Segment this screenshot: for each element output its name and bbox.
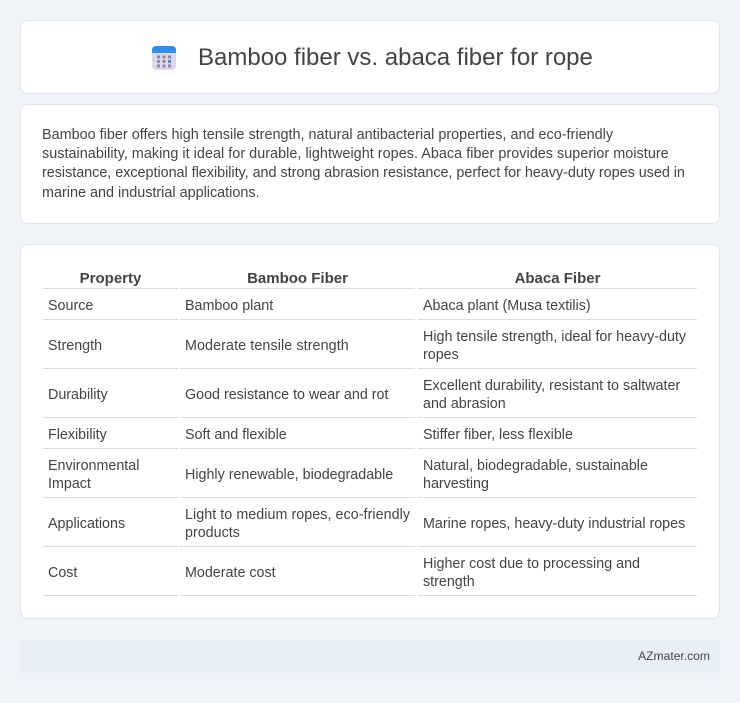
summary text: marine and industrial applications. — [42, 185, 260, 201]
row: strength: Moderate tensile strength — [185, 338, 349, 354]
table header — [80, 270, 600, 287]
row: flexibility: Stiffer fiber, less flexible — [423, 427, 573, 443]
summary text: resistance, exceptional flexibility, and strong abrasion resistance, perfect for heavy-duty ropes used in — [42, 165, 685, 181]
row: environmental impact: harvesting — [423, 476, 489, 492]
row: cost: Higher cost due to processing and — [423, 556, 640, 572]
row: strength: High tensile strength, ideal for heavy-duty — [423, 329, 686, 345]
summary text: Bamboo fiber offers high tensile strength, natural antibacterial properties, and eco-friendly — [42, 127, 613, 143]
row: environmental impact — [48, 458, 648, 492]
row: flexibility: Soft and flexible — [185, 427, 287, 443]
row: applications: products — [185, 525, 240, 541]
row: flexibility — [48, 427, 573, 443]
row: environmental impact: Natural, biodegradable, sustainable — [423, 458, 648, 474]
footer credit: AZmater.com — [638, 649, 710, 663]
panel: title card — [20, 20, 720, 94]
summary text — [42, 127, 685, 201]
row: strength — [48, 329, 686, 363]
row: applications: Applications — [48, 516, 125, 532]
row: source: Bamboo plant — [185, 298, 273, 314]
row: durability: and abrasion — [423, 396, 506, 412]
summary text: sustainability, making it ideal for durable, lightweight ropes. Abaca fiber provides superior moisture — [42, 146, 669, 162]
row: environmental impact: Highly renewable, biodegradable — [185, 467, 393, 483]
row: flexibility: Flexibility — [48, 427, 107, 443]
row: applications: Light to medium ropes, eco-friendly — [185, 507, 410, 523]
table header: Bamboo Fiber — [247, 270, 348, 287]
row: durability: Durability — [48, 387, 108, 403]
row: strength: ropes — [423, 347, 459, 363]
row: source: Source — [48, 298, 93, 314]
row: durability: Excellent durability, resistant to saltwater — [423, 378, 680, 394]
row: environmental impact: Environmental — [48, 458, 139, 474]
panel: comparison table card — [20, 244, 720, 619]
footer bar — [20, 640, 720, 673]
row: cost: strength — [423, 574, 475, 590]
row: source: Abaca plant (Musa textilis) — [423, 298, 591, 314]
row: applications: Marine ropes, heavy-duty industrial ropes — [423, 516, 685, 532]
row: durability — [48, 378, 680, 412]
comparison table — [43, 270, 697, 596]
panel: summary card — [20, 104, 720, 224]
row: source — [48, 298, 591, 314]
row: cost: Moderate cost — [185, 565, 276, 581]
row: environmental impact: Impact — [48, 476, 91, 492]
row: strength: Strength — [48, 338, 102, 354]
row: durability: Good resistance to wear and rot — [185, 387, 388, 403]
icon: calendar — [152, 46, 176, 70]
row: applications — [48, 507, 685, 541]
table header: Abaca Fiber — [515, 270, 600, 287]
title: Bamboo fiber vs. abaca fiber for rope — [198, 44, 593, 71]
row: cost: Cost — [48, 565, 77, 581]
row: cost — [48, 556, 640, 590]
table header: Property — [80, 270, 141, 287]
